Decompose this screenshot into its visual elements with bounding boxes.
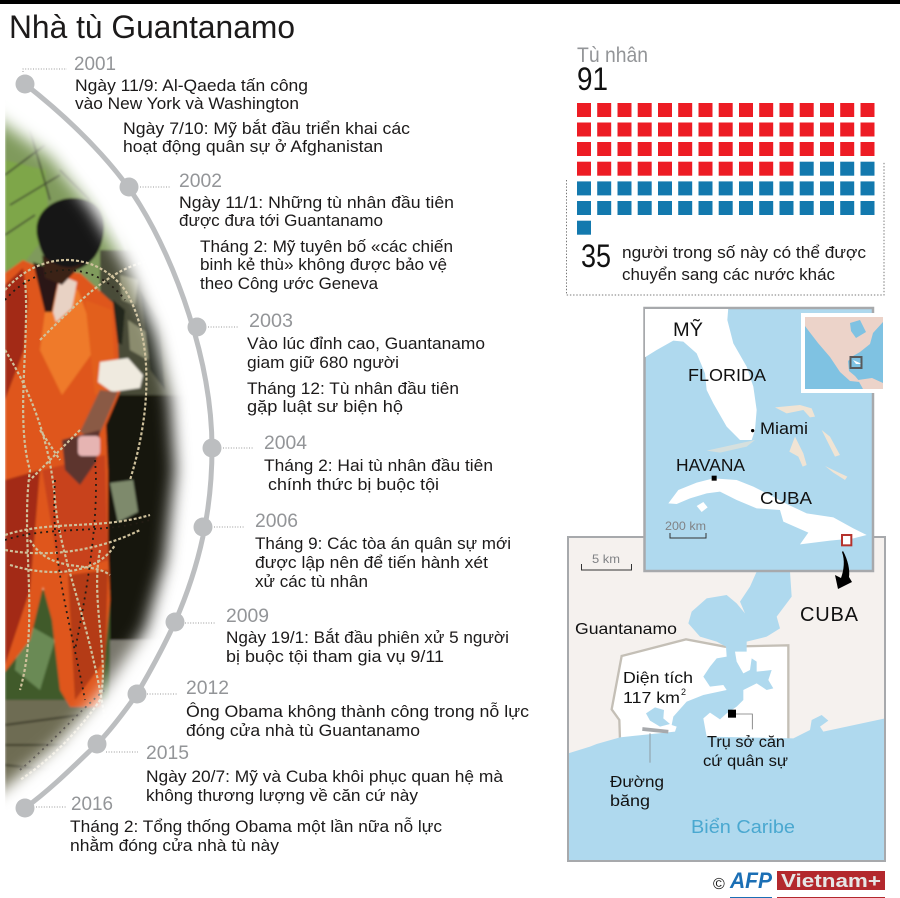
label: runway: băng: [610, 793, 650, 810]
timeline entry: 2003: [247, 311, 485, 416]
credit: AFP and Vietnam+: AFP: [729, 868, 772, 893]
timeline entry: 2015: không thương lượng về căn cứ này: [146, 787, 419, 805]
head: [36, 198, 104, 272]
top bar: [0, 0, 900, 4]
timeline entry: 2002: 2002: [179, 171, 222, 192]
timeline entry: 2002: được đưa tới Guantanamo: [179, 212, 383, 230]
timeline entry: 2004: chính thức bị buộc tội: [268, 476, 439, 494]
timeline entry: 2012: [186, 678, 529, 740]
bandaged arm and hands: [98, 358, 143, 392]
timeline entry: 2002: binh kẻ thù» không được bảo vệ: [200, 256, 447, 274]
lower ground: [5, 588, 112, 702]
scale: 200 km: 200 km: [665, 519, 706, 533]
timeline entry: 2001: Ngày 7/10: Mỹ bắt đầu triển khai các: [123, 119, 410, 138]
label: Florida: FLORIDA: [688, 365, 766, 385]
timeline entry: 2001: 2001: [74, 54, 116, 75]
label: runway: [610, 774, 664, 810]
title: Nhà tù Guantanamo: [9, 9, 295, 45]
label: area: Diện tích: [623, 670, 693, 687]
inset: North America locator: [801, 313, 885, 393]
callout: 35 transferable: chuyển sang các nước khác: [622, 266, 835, 284]
soldier camouflage: [98, 249, 182, 397]
timeline entry: 2004: 2004: [264, 433, 307, 454]
label: Caribbean Sea: Biển Caribe: [691, 817, 795, 837]
callout: 35 transferable: 35: [581, 238, 611, 274]
callout: 35 transferable: người trong số này có thể được: [622, 244, 866, 262]
map: Florida and Cuba: [643, 307, 873, 571]
label: headquarters: [703, 734, 788, 770]
timeline entry: 2003: Vào lúc đỉnh cao, Guantanamo: [247, 335, 485, 353]
credit: AFP and Vietnam+: ©: [713, 876, 725, 893]
timeline entry: 2003: 2003: [249, 311, 293, 332]
timeline entry: 2009: 2009: [226, 606, 269, 627]
timeline entry: 2003: giam giữ 680 người: [247, 354, 399, 372]
timeline entry: 2012: Ông Obama không thành công trong nỗ lực: [186, 702, 529, 721]
scale: 5 km: 5 km: [592, 552, 620, 566]
label: runway: Đường: [610, 774, 664, 791]
Cuba land: [668, 478, 867, 544]
timeline entry: 2016: Tháng 2: Tổng thống Obama một lần nữa nỗ lực: [70, 817, 442, 836]
prisoners heading: Tù nhân: [577, 44, 648, 67]
timeline entry: 2009: Ngày 19/1: Bắt đầu phiên xử 5 người: [226, 628, 509, 647]
timeline entry: 2009: bị buộc tội tham gia vụ 9/11: [226, 648, 444, 666]
timeline entry: 2015: Ngày 20/7: Mỹ và Cuba khôi phục quan hệ mà: [146, 768, 504, 786]
label: headquarters: Trụ sở căn: [707, 734, 785, 751]
map: Guantanamo base: [568, 537, 885, 863]
timeline entry: 2002: theo Công ước Geneva: [200, 275, 379, 293]
timeline entry: 2001: vào New York và Washington: [75, 95, 299, 113]
timeline entry: 2002: [179, 171, 454, 293]
label: area: 117 km: [623, 690, 680, 707]
callout: 35 transferable: [581, 238, 866, 284]
timeline entry: 2002: Tháng 2: Mỹ tuyên bố «các chiến: [200, 238, 453, 256]
timeline entry: 2003: gặp luật sư biện hộ: [247, 398, 403, 416]
label: My: MỸ: [673, 319, 703, 341]
barbed wire: [5, 260, 150, 780]
panel: prisoners count: [566, 44, 884, 295]
timeline curve with markers: [16, 69, 254, 818]
Guantanamo locator: [842, 535, 851, 545]
timeline entry: 2006: Tháng 9: Các tòa án quân sự mới: [255, 535, 511, 553]
timeline entry: 2003: Tháng 12: Tù nhân đầu tiên: [247, 380, 459, 398]
timeline entry: 2006: xử các tù nhân: [255, 573, 368, 591]
scale: 5 km: [582, 552, 632, 570]
arrow: Cuba to Guantanamo detail: [835, 551, 852, 589]
city markers: [751, 429, 754, 432]
Bahamas: [707, 405, 847, 480]
timeline entry: 2004: [264, 433, 493, 494]
label: Havana: HAVANA: [676, 455, 745, 475]
photo: prisoner in orange behind barbed wire: [5, 112, 188, 800]
total number: 91: [577, 61, 608, 97]
unit chart: 91 squares: [577, 103, 874, 235]
bay and sea: [568, 572, 885, 863]
credit: AFP and Vietnam+: [713, 868, 885, 898]
orange jumpsuit: [5, 260, 120, 707]
timeline entry: 2004: Tháng 2: Hai tù nhân đầu tiên: [264, 457, 493, 475]
timeline entry: 2016: 2016: [71, 794, 113, 815]
timeline entry: 2009: [226, 606, 509, 666]
timeline entry: 2001: hoạt động quân sự ở Afghanistan: [123, 138, 383, 156]
timeline entry: 2006: 2006: [255, 511, 298, 532]
background greenery: [5, 112, 130, 292]
headquarters marker: [728, 710, 736, 718]
label: Guantanamo: Guantanamo: [575, 621, 677, 638]
timeline entry: 2001: [74, 54, 410, 156]
timeline entry: 2006: được lập nên để tiến hành xét: [255, 554, 488, 572]
label: Cuba: CUBA: [760, 488, 812, 508]
dark strip at far left: [5, 405, 22, 480]
timeline entry: 2016: nhằm đóng cửa nhà tù này: [70, 836, 280, 855]
timeline entry: 2002: Ngày 11/1: Những tù nhân đầu tiên: [179, 194, 454, 212]
label: Miami: Miami: [760, 419, 808, 438]
dotted callout frame: [566, 162, 884, 295]
timeline entry: 2016: [70, 794, 442, 855]
label: area: 2: [681, 687, 686, 697]
label: area: [623, 670, 693, 707]
timeline entry: 2012: 2012: [186, 678, 229, 699]
timeline entry: 2015: [146, 743, 504, 805]
neck and shirt: [33, 262, 60, 312]
label: headquarters: cứ quân sự: [703, 753, 788, 770]
base territory: [612, 639, 788, 740]
timeline entry: 2015: 2015: [146, 743, 189, 764]
timeline entry: 2012: đóng cửa nhà tù Guantanamo: [186, 722, 420, 740]
credit: AFP and Vietnam+: Vietnam+: [781, 871, 881, 891]
timeline entry: 2001: Ngày 11/9: Al-Qaeda tấn công: [75, 77, 308, 95]
runway: [642, 729, 668, 732]
label: Cuba: CUBA: [800, 604, 859, 626]
dark lower right: [104, 394, 188, 642]
timeline entry: 2006: [255, 511, 511, 591]
Florida land: [643, 307, 757, 440]
